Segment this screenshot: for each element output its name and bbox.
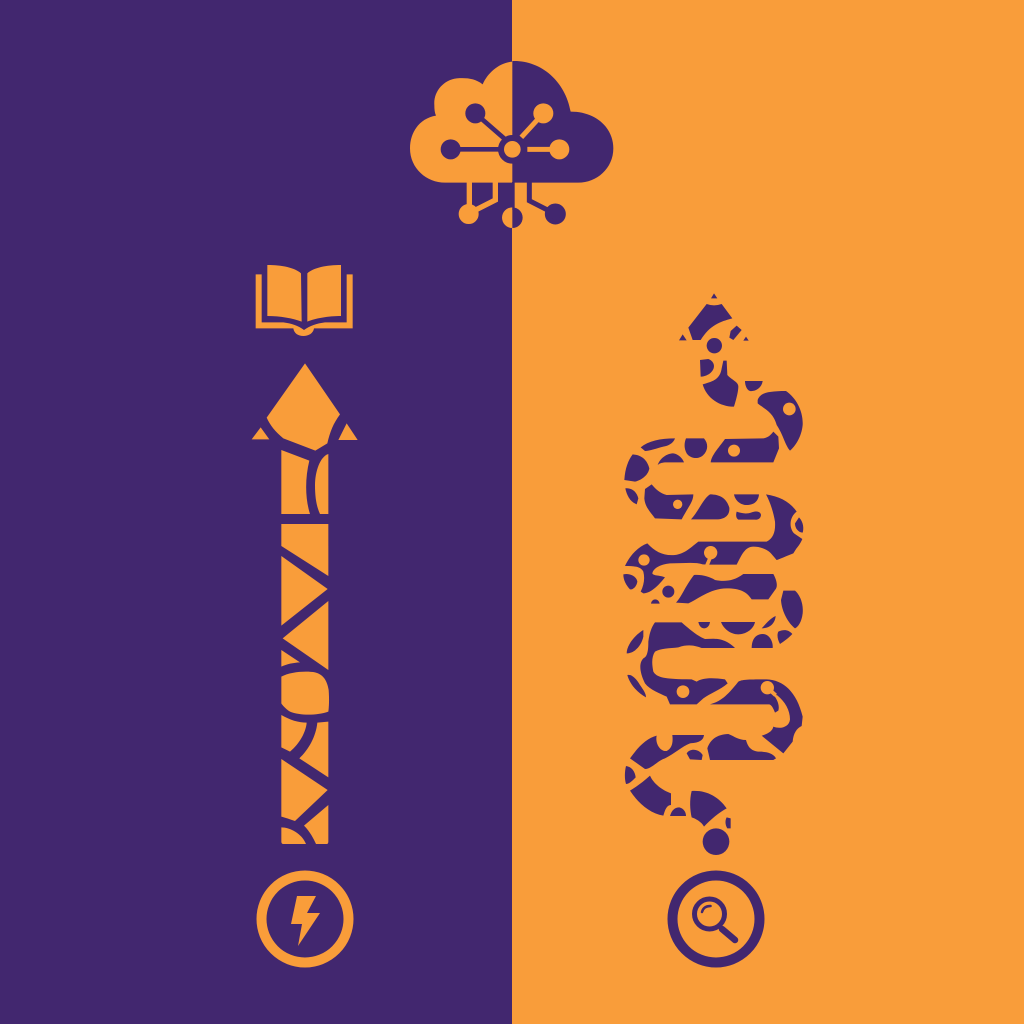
lens highlight bbox=[702, 906, 710, 912]
right page bbox=[307, 265, 341, 322]
handle bbox=[722, 929, 735, 940]
cloud left half bbox=[410, 62, 512, 183]
snake lower coils and tail bbox=[625, 591, 803, 855]
ring bbox=[672, 876, 760, 962]
left connector stems bbox=[461, 182, 495, 221]
left page bbox=[267, 265, 302, 322]
snake middle coil bbox=[623, 530, 802, 604]
icon: lightning bolt in ring bbox=[262, 876, 348, 962]
icon: open book bbox=[256, 265, 353, 336]
right network nodes bbox=[504, 103, 569, 159]
book cover bbox=[256, 274, 353, 336]
panel: purple left half bbox=[0, 0, 512, 1024]
icon: split cloud network bbox=[410, 61, 613, 228]
arrow head and upper shaft bbox=[252, 363, 358, 514]
snake head and upper coils bbox=[624, 293, 803, 560]
lower shaft segments bbox=[281, 524, 329, 844]
bolt bbox=[291, 896, 320, 946]
cloud right half bbox=[512, 61, 613, 183]
lens bbox=[694, 899, 724, 929]
right connector stem bbox=[513, 182, 563, 222]
icon: magnifying glass in ring bbox=[672, 876, 760, 962]
left network nodes bbox=[441, 103, 527, 164]
arrow: straight segmented arrow bbox=[252, 363, 358, 844]
ring bbox=[262, 876, 348, 962]
split centre node bbox=[502, 207, 523, 228]
arrow: winding snake arrow bbox=[623, 293, 803, 855]
panel: orange right half bbox=[512, 0, 1024, 1024]
